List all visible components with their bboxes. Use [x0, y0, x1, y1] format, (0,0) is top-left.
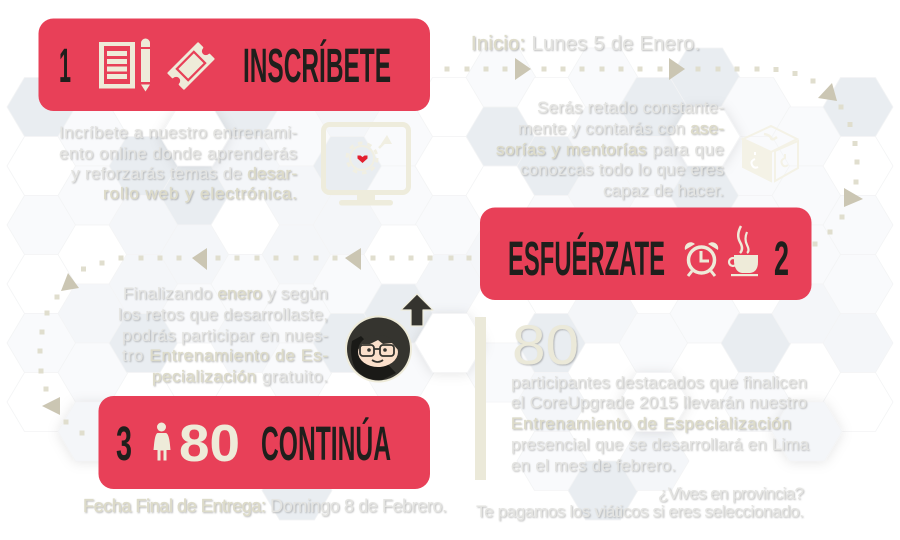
text: travel note: ¿Vives en provincia? [658, 484, 804, 503]
text: step 2 description [496, 98, 724, 200]
icon: coffee cup [729, 226, 758, 276]
text: step 1 description [59, 123, 297, 203]
panel: step 2 esfuérzate: ESFUÉRZATE [508, 232, 665, 286]
icon: document and pencil [99, 39, 150, 92]
big number 80: 80 [512, 313, 579, 376]
avatar: character with glasses [345, 316, 412, 382]
icon: alarm clock [685, 242, 718, 276]
text: step 2 description: mente y contarás con ase- [518, 119, 724, 138]
text: step 3 description: pecialización gratuito. [152, 367, 328, 386]
text: step 3 description: Finalizando enero y según [123, 284, 328, 303]
vertical accent bar [475, 317, 486, 480]
dotted path bottom: from step 2 to step 3 [38, 248, 472, 436]
text: step 1 description: Incríbete a nuestro entrenami- [59, 123, 297, 142]
text: step 2 description: capaz de hacer. [603, 181, 724, 200]
icon: up arrow [401, 294, 433, 326]
dotted path top: from step 1 to step 2 [444, 58, 863, 246]
text: step 1 description: rollo web y electrónica. [103, 184, 297, 203]
text: travel note: Te pagamos los viáticos si eres seleccionado. [476, 502, 804, 521]
icon: person [154, 422, 170, 460]
icon: ticket [168, 43, 214, 89]
text: participants description [511, 373, 810, 475]
heading: continúa: CONTINÚA [261, 416, 391, 471]
number 80: 80 [179, 415, 240, 473]
text: step 3 description: podrás participar en nues- [122, 326, 328, 345]
panel: step 3 continúa [98, 396, 430, 489]
heading: inscríbete: INSCRÍBETE [243, 39, 391, 93]
text: step 2 description: conozcas todo lo que eres [520, 160, 724, 179]
text: final date: Fecha Final de Entrega: Domingo 8 de Febrero. [83, 496, 447, 516]
text: step 2 description: Serás retado constante- [537, 98, 724, 117]
panel: step 1 inscríbete: 1 [59, 40, 71, 93]
icon: question cube [743, 126, 798, 181]
text: start date: Inicio: Lunes 5 de Enero. [471, 33, 700, 55]
panel: step 1 inscríbete [38, 18, 430, 111]
text: step 1 description: y reforzarás temas de desar- [71, 164, 297, 183]
text: step 1 description: ento online donde aprenderás [59, 144, 297, 163]
text: travel note [476, 484, 804, 521]
step number 2: 2 [774, 233, 789, 286]
panel: step 2 esfuérzate [480, 208, 812, 300]
text: participants description: en el mes de febrero. [511, 456, 676, 475]
step number 3: 3 [116, 418, 132, 471]
text: participants description: presencial que se desarrollará en Lima [511, 435, 810, 454]
text: step 3 description: tro Entrenamiento de Es- [122, 346, 328, 365]
text: step 3 description: los retos que desarrollaste, [118, 305, 328, 324]
text: participants description: el CoreUpgrade 2015 llevarán nuestro [511, 393, 807, 412]
text: participants description: Entrenamiento de Especialización [511, 414, 791, 433]
text: participants description: participantes destacados que finalicen [511, 373, 807, 392]
text: step 3 description [118, 284, 328, 386]
icon: monitor with gear and heart [324, 124, 408, 206]
text: step 2 description: sorías y mentorías para que [496, 140, 724, 159]
